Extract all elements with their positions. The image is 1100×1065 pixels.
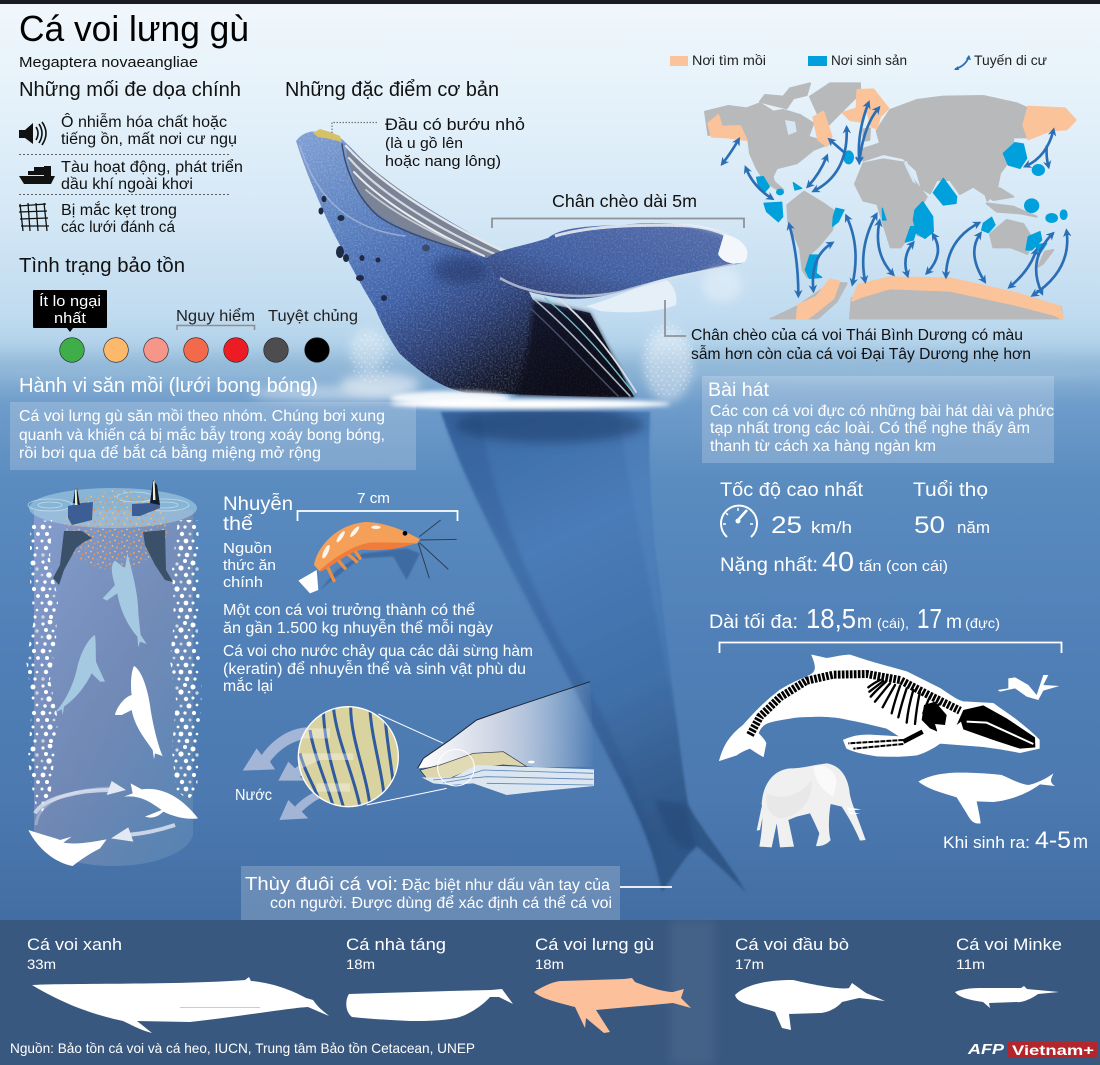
logo: AFP: AFP [967,1041,1005,1058]
threat: pollution text: Ô nhiễm hóa chất hoặc [61,114,227,131]
species: sperm whale: 18m [346,956,375,972]
newborn length label [943,827,1088,854]
adult whale silhouette with skeleton [719,655,1039,761]
species: minke whale [955,935,1062,1008]
stats: maximum length: (đực) [965,615,1000,631]
extinct label: Tuyệt chủng [268,308,358,325]
water surface highlights [0,363,1100,401]
circling whale right [124,783,198,819]
callout: head bumps [332,115,525,170]
species: sperm whale: Cá nhà táng [346,935,446,954]
panel: tail fluke: Đặc biệt như dấu vân tay của [402,877,610,894]
map legend: Nơi sinh sản [831,52,907,68]
size comparison illustrations [719,655,1059,847]
map legend [670,52,1047,70]
bubble net cylinder diagram [26,480,202,866]
panel: tail fluke: Thùy đuôi cá voi: [245,874,398,894]
stats: maximum length [709,603,1062,653]
krill size bracket: 7 cm [357,490,390,507]
circling whale left [28,830,107,866]
panel: conservation status [19,255,358,362]
skin grain [296,131,634,397]
panel: song: tạp nhất trong các loài. Có thể nghe thấy âm [710,420,1030,437]
title: Cá voi lưng gù [19,8,249,49]
panel: tail fluke [241,866,672,920]
species: blue whale: 33m [27,956,56,972]
panel: tail fluke: con người. Được dùng để xác định cá thể cá voi [270,895,612,912]
current arrows [35,781,175,842]
panel: song [702,376,1054,463]
endangered label: Nguy hiểm [176,308,255,325]
dark patch behind flipper [432,256,488,284]
heading: conservation status: Tình trạng bảo tồn [19,255,185,277]
krill feeding text: (keratin) để nhuyễn thể và sinh vật phù du [223,661,526,678]
stats: lifespan: Tuổi thọ [913,480,988,501]
logo: Vietnam+: Vietnam+ [1012,1042,1094,1058]
top bar [0,0,1100,4]
callout: flipper length: Chân chèo dài 5m [552,191,697,211]
pectoral flipper [487,223,747,299]
belly grooves [530,298,636,396]
icon: speaker [19,122,46,145]
callout: flipper colour: Chân chèo của cá voi Thái Bình Dương có màu [691,327,1023,344]
source line: Nguồn: Bảo tồn cá voi và cá heo, IUCN, Trung tâm Bảo tồn Cetacean, UNEP [10,1040,475,1056]
species: blue whale [27,935,329,1033]
krill heading: Nguồn [223,540,272,557]
threat: nets text: Bị mắc kẹt trong [61,202,177,219]
krill size bracket [298,490,458,521]
threat: nets text: các lưới đánh cá [61,219,175,236]
spots [318,196,430,301]
stats: weight: 40 [822,546,854,577]
stats: weight: tấn (con cái) [859,558,948,575]
species: humpback whale: Cá voi lưng gù [535,935,654,954]
stats: top speed: km/h [811,518,852,537]
callout: flipper colour: sẫm hơn còn của cá voi Đại Tây Dương nhẹ hơn [691,346,1031,363]
newborn length label: Khi sinh ra: [943,833,1030,852]
stats: top speed: 25 [771,512,802,539]
heading: bubble-net hunting: Hành vi săn mồi (lưới bong bóng) [19,375,318,397]
stats: maximum length: m [946,612,962,633]
icon: speedometer [721,506,757,537]
status scale dots [60,338,329,362]
newborn length label: 4-5 [1035,827,1071,854]
icon: ship [19,166,55,184]
species: humpback whale: 18m [535,956,564,972]
lakes and bays [785,120,916,184]
callout: head bumps: Đầu có bướu nhỏ [385,115,525,134]
species: minke whale: 11m [956,956,985,972]
krill feeding text: Cá voi cho nước chảy qua các dải sừng hàm [223,643,533,660]
baleen diagram [243,682,595,820]
species: blue whale: Cá voi xanh [27,935,122,954]
breeding grounds [757,143,1067,278]
map legend: Tuyến di cư [974,52,1047,68]
scientific name: Megaptera novaeangliae [19,54,198,71]
whale descending 2 [55,635,105,715]
krill illustration [298,520,457,593]
species: bowhead whale: Cá voi đầu bò [735,935,849,954]
map legend: Nơi tìm mồi [692,52,766,68]
world map [705,83,1076,319]
stats: maximum length: (cái), [877,615,909,631]
panel: song: Bài hát [708,380,770,401]
krill heading: thể [223,514,253,535]
water label: Nước [235,787,272,804]
elephant [757,763,866,847]
stats: maximum length: 17 [917,603,942,634]
species: bowhead whale [735,935,885,1030]
threat: pollution text [61,114,237,148]
surface disc [29,488,197,528]
krill swarm [64,490,168,570]
stats: lifespan: năm [957,518,990,537]
barnacles on head [313,129,342,142]
icon: fishing net [19,203,49,231]
panel: threats [19,79,243,236]
whale descending 3 [115,666,163,759]
krill heading: chính [223,574,263,591]
main whale: underwater body [441,407,746,893]
krill feeding text: Một con cá voi trưởng thành có thể [223,602,475,619]
main whale: breaching body [296,129,747,397]
krill feeding text [223,602,533,695]
bubble column right [170,520,202,800]
panel: hunting description [10,402,416,470]
species: minke whale: Cá voi Minke [956,935,1062,954]
krill heading: Nhuyễn [223,493,293,515]
krill feeding text: mắc lại [223,678,273,695]
diver [998,675,1059,700]
splash at waterline [340,267,742,409]
krill feeding text: ăn gần 1.500 kg nhuyễn thể mỗi ngày [223,620,493,637]
callout: head bumps: (là u gồ lên [385,136,463,152]
water arrows [243,727,332,820]
migration routes [723,103,1067,295]
panel: hunting description: quanh và khiến cá bị mắc bẫy trong xoáy bong bóng, [19,427,385,444]
stats: maximum length: 18,5 [806,603,856,634]
threat: shipping text: dầu khí ngoài khơi [61,176,193,193]
dark belly [515,300,634,397]
feeding grounds [708,89,1076,319]
whale head cross-section [418,682,595,768]
threat: shipping text: Tàu hoạt động, phát triển [61,159,243,176]
stats: weight [720,546,948,577]
stats: weight: Nặng nhất: [720,555,818,576]
lower flipper [586,279,677,312]
heading: threats: Những mối đe dọa chính [19,79,241,101]
panel: song: Các con cá voi đực có những bài hát dài và phức [710,403,1054,420]
threat: nets text [61,202,177,236]
threat: shipping text [61,159,243,193]
heading: basic features: Những đặc điểm cơ bản [285,79,499,101]
krill heading [223,493,293,591]
stats: top speed: Tốc độ cao nhất [720,480,864,501]
panel: hunting description: Cá voi lưng gù săn mồi theo nhóm. Chúng bơi xung [19,408,385,425]
cylinder body [34,510,193,866]
callout: head bumps: hoặc nang lông) [385,154,501,170]
bubble column left [26,520,58,815]
species: humpback whale [534,935,691,1033]
newborn whale [918,773,1055,823]
krill heading: thức ăn [223,557,276,574]
least concern tag [33,290,107,332]
newborn length label: m [1073,832,1088,853]
whales at the surface [53,480,173,585]
callout: flipper colour [665,300,1031,363]
stats: maximum length: m [857,612,872,633]
whale descending 1 [103,553,147,647]
least concern tag: Ít lo ngại [39,293,101,310]
upper throat groove band [345,143,510,258]
callout: flipper length [492,191,744,228]
species: sperm whale [346,935,513,1021]
magnified baleen [298,707,398,807]
stats: lifespan: 50 [914,512,945,539]
stats: maximum length: Dài tối đa: [709,612,798,633]
land masses [705,83,1063,319]
species: bowhead whale: 17m [735,956,764,972]
cylinder base rim [36,788,110,825]
panel: species comparison band [0,920,1100,1065]
least concern tag: nhất [54,310,87,327]
stats: lifespan [913,480,990,539]
panel: song: thanh từ cách xa hàng ngàn km [710,438,936,455]
panel: hunting description: rồi bơi qua để bắt cá bằng miệng mở rộng [19,445,321,462]
stats: top speed [720,480,864,539]
threat: pollution text: tiếng ồn, mất nơi cư ngụ [61,131,237,148]
